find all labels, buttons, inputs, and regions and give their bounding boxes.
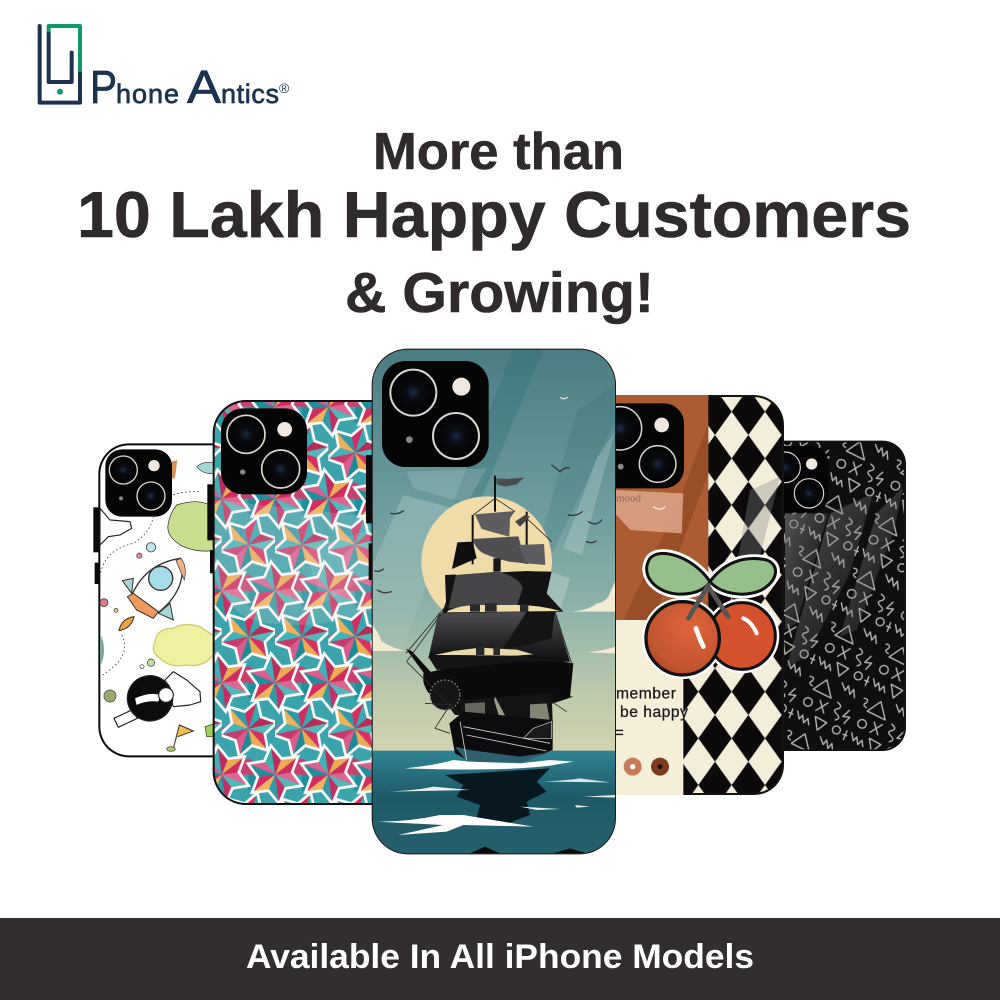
camera block (105, 449, 172, 517)
phone case 5: chalk symbols (784, 440, 906, 751)
brand logo: Phone Antics: P (90, 61, 117, 113)
camera block (382, 361, 489, 467)
phone case 3: pirate ship (centre) (372, 349, 616, 854)
camera block (221, 408, 307, 494)
astronaut (114, 669, 201, 727)
clouds (570, 582, 615, 612)
cherries sticker (642, 553, 779, 679)
brand logo: Phone Antics: ntics (221, 79, 279, 109)
sea (373, 751, 615, 854)
moon (421, 496, 552, 610)
headline (77, 123, 911, 325)
cream panel (616, 620, 684, 795)
brand logo: Phone Antics: hone (116, 79, 179, 109)
phone case 2: geometric star pattern (207, 400, 372, 805)
phone case 1: space doodles (93, 443, 213, 758)
flowers (624, 758, 642, 776)
sky (373, 350, 615, 753)
camera block (590, 403, 684, 488)
text: member be happy: be happy (620, 704, 688, 721)
brand logo: Phone Antics: A (187, 61, 221, 113)
headline: 10 Lakh Happy Customers (77, 178, 911, 251)
birds (375, 397, 602, 593)
text: member be happy: = (615, 725, 624, 742)
camera block (757, 446, 828, 513)
ship (406, 476, 573, 762)
waves and reflection (377, 760, 615, 853)
light reflections (373, 350, 615, 678)
phone case 4: cherries and harlequin (616, 395, 784, 795)
brown panel (616, 395, 708, 620)
brand logo: Phone Antics: ® (279, 80, 290, 96)
text: member be happy (616, 686, 688, 736)
footer banner (0, 918, 1000, 1000)
headline: More than (373, 123, 624, 181)
brand logo: Phone Antics (40, 26, 290, 113)
side buttons of centre phone (366, 455, 373, 580)
footer banner: Available In All iPhone Models (246, 938, 754, 976)
text: member be happy: member (616, 685, 676, 702)
headline: & Growing! (345, 261, 654, 325)
text: mood: mood (616, 493, 642, 505)
